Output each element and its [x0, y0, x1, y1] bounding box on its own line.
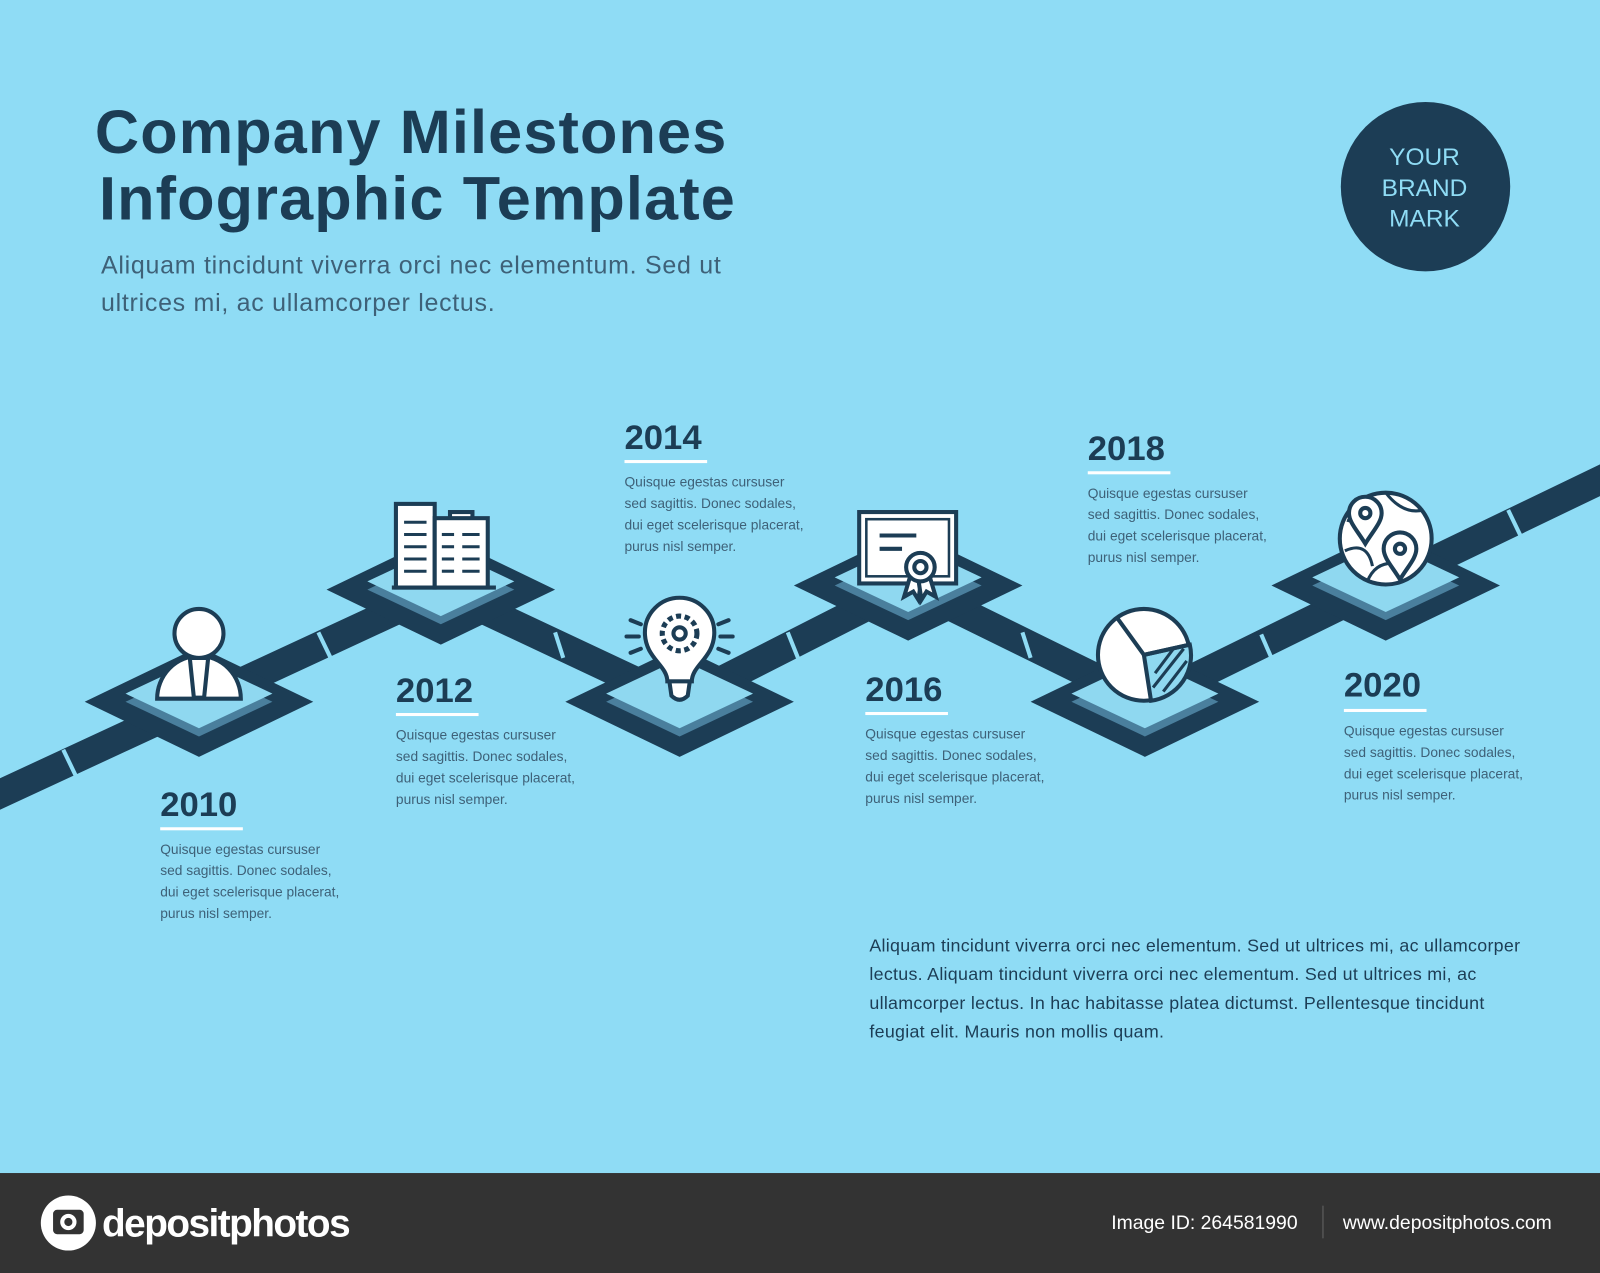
- subtitle: ultrices mi, ac ullamcorper lectus.: [101, 289, 495, 317]
- icon: certificate: [859, 512, 956, 600]
- milestone 2010: Quisque egestas cursuser: [160, 842, 321, 857]
- milestone 2020: Quisque egestas cursuser: [1344, 723, 1504, 738]
- footer info: Image ID: 264581990: [1111, 1212, 1298, 1234]
- milestone 2020: [1344, 667, 1523, 803]
- milestone 2010: [160, 786, 339, 921]
- milestone 2010: purus nisl semper.: [160, 906, 272, 921]
- milestone 2018: sed sagittis. Donec sodales,: [1088, 507, 1259, 522]
- footer info: www.depositphotos.com: [1342, 1212, 1552, 1234]
- bottom paragraph: Aliquam tincidunt viverra orci nec elementum. Sed ut ultrices mi, ac ullamcorper: [869, 936, 1520, 956]
- milestone 2016: purus nisl semper.: [865, 791, 977, 806]
- milestone 2010: dui eget scelerisque placerat,: [160, 885, 339, 900]
- milestone 2010: sed sagittis. Donec sodales,: [160, 863, 332, 878]
- icon: light bulb: [627, 598, 733, 700]
- icon: globe with pins: [1340, 493, 1432, 584]
- milestone 2018: [1088, 430, 1267, 565]
- bottom paragraph: lectus. Aliquam tincidunt viverra orci nec elementum. Sed ut ultrices mi, ac: [869, 964, 1477, 984]
- milestone 2016: 2016: [865, 671, 942, 709]
- platform 2010: [85, 647, 313, 757]
- title: Company Milestones: [95, 98, 727, 166]
- milestone 2012: sed sagittis. Donec sodales,: [396, 749, 567, 764]
- milestone 2018: Quisque egestas cursuser: [1088, 486, 1248, 501]
- timeline track: [0, 474, 1600, 799]
- milestone 2020: sed sagittis. Donec sodales,: [1344, 745, 1515, 760]
- platform 2012: [327, 534, 555, 645]
- milestone 2014: Quisque egestas cursuser: [624, 475, 785, 490]
- icon: buildings: [392, 504, 496, 588]
- milestone 2014: sed sagittis. Donec sodales,: [624, 496, 796, 511]
- title: Infographic Template: [99, 164, 736, 232]
- bottom paragraph: feugiat elit. Mauris non mollis quam.: [869, 1021, 1164, 1041]
- milestone 2012: dui eget scelerisque placerat,: [396, 770, 575, 785]
- brand mark circle: [1341, 102, 1510, 271]
- platform 2014: [565, 647, 794, 757]
- brand mark circle: BRAND: [1382, 175, 1467, 202]
- milestone 2016: sed sagittis. Donec sodales,: [865, 748, 1037, 763]
- logo: depositphotos: [102, 1202, 349, 1245]
- bottom paragraph: ullamcorper lectus. In hac habitasse platea dictumst. Pellentesque tincidunt: [869, 993, 1485, 1013]
- subtitle: [101, 251, 722, 317]
- milestone 2012: Quisque egestas cursuser: [396, 728, 556, 743]
- logo: [41, 1195, 349, 1251]
- milestone 2012: purus nisl semper.: [396, 792, 508, 807]
- subtitle: Aliquam tincidunt viverra orci nec elementum. Sed ut: [101, 251, 722, 279]
- footer info: [1111, 1206, 1552, 1238]
- milestone 2018: dui eget scelerisque placerat,: [1088, 529, 1267, 544]
- milestone 2016: [865, 671, 1044, 806]
- milestone 2014: dui eget scelerisque placerat,: [624, 517, 804, 532]
- footer bar: [0, 1173, 1600, 1273]
- milestone 2020: purus nisl semper.: [1344, 788, 1456, 803]
- milestone 2020: dui eget scelerisque placerat,: [1344, 766, 1523, 781]
- icon: person: [157, 609, 241, 699]
- platform 2016: [794, 530, 1022, 641]
- platform 2018: [1031, 647, 1259, 757]
- bottom paragraph: [869, 936, 1520, 1041]
- milestone 2020: 2020: [1344, 667, 1421, 705]
- brand mark circle: MARK: [1389, 205, 1461, 232]
- platform 2020: [1271, 530, 1500, 641]
- milestone 2018: purus nisl semper.: [1088, 550, 1199, 565]
- milestone 2014: [624, 419, 804, 554]
- milestone 2010: 2010: [160, 786, 237, 824]
- title: [95, 98, 736, 232]
- brand mark circle: YOUR: [1389, 144, 1460, 171]
- milestone 2012: 2012: [396, 672, 473, 710]
- milestone 2014: 2014: [624, 419, 702, 457]
- milestone 2012: [396, 672, 575, 807]
- milestone 2016: Quisque egestas cursuser: [865, 727, 1026, 742]
- icon: pie chart: [1098, 609, 1191, 701]
- milestone 2016: dui eget scelerisque placerat,: [865, 769, 1044, 784]
- milestone 2014: purus nisl semper.: [624, 539, 736, 554]
- milestone 2018: 2018: [1088, 430, 1165, 468]
